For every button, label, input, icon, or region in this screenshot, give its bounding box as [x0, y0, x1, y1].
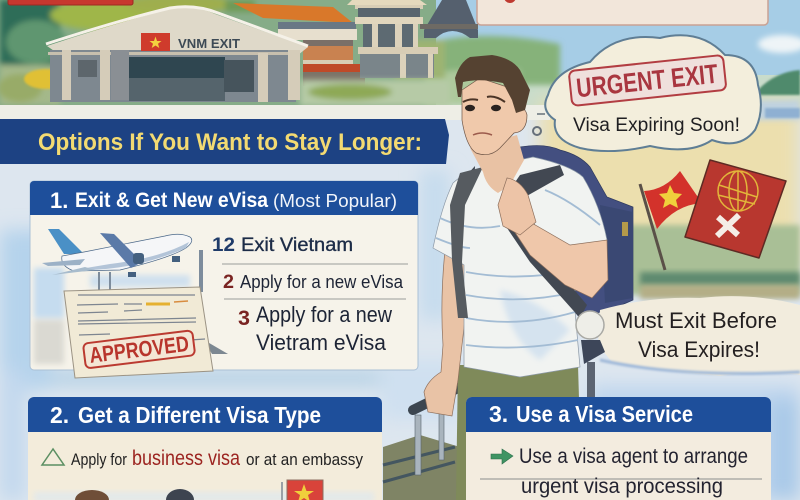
option 3 heading: Use a Visa Service	[516, 401, 693, 427]
stamp text: APPROVED	[88, 331, 190, 368]
mouth	[473, 133, 492, 135]
terracotta roof building	[233, 3, 382, 86]
thought bubble: urgent exit	[533, 35, 761, 151]
step 3: 3	[238, 307, 250, 330]
icon: Vietnam flag	[640, 171, 702, 270]
step 3	[238, 302, 392, 355]
step 2: 2	[223, 272, 234, 293]
sky and coast landscape	[420, 0, 800, 299]
tower building	[347, 0, 438, 78]
right strap	[503, 165, 587, 318]
top right card	[477, 0, 768, 25]
backpack	[450, 146, 633, 320]
panel: option 1	[30, 181, 418, 378]
right arm	[510, 222, 608, 298]
callout text: Must Exit Before	[615, 308, 777, 333]
option 3 line 2: urgent visa processing	[521, 475, 723, 498]
option 2 highlighted text: business visa	[132, 447, 240, 470]
document: approved visa	[64, 287, 228, 378]
icon: green arrow	[491, 449, 513, 464]
head	[462, 78, 527, 155]
pants	[456, 365, 582, 500]
option 1 number: 1.	[50, 188, 68, 213]
left strap	[450, 167, 483, 318]
icon: passport	[685, 160, 786, 258]
option 3 line 1: Use a visa agent to arrange	[519, 445, 748, 468]
heading text: Options If You Want to Stay Longer:	[38, 129, 422, 156]
icon: triangle	[42, 449, 64, 465]
luggage	[383, 388, 460, 500]
step 3: Vietram eVisa	[256, 330, 387, 355]
step 2: Apply for a new eVisa	[240, 271, 404, 292]
stamp: urgent exit: URGENT EXIT	[575, 59, 720, 103]
section heading band	[0, 119, 449, 164]
option 3 number: 3.	[489, 401, 508, 427]
option 1 note: (Most Popular)	[273, 191, 397, 211]
option 2 number: 2.	[50, 402, 69, 428]
hangar	[46, 7, 308, 102]
bubble caption: Visa Expiring Soon!	[573, 115, 740, 136]
watercolor behind plane	[34, 268, 190, 364]
building sign text: VNM EXIT	[178, 37, 240, 51]
character: traveller	[424, 55, 633, 500]
hair	[455, 55, 530, 113]
hand	[498, 178, 536, 235]
left arm	[424, 250, 466, 416]
icon: airplane	[42, 229, 192, 277]
callout text: Visa Expires!	[638, 337, 760, 362]
option 2 heading: Get a Different Visa Type	[78, 402, 321, 428]
neck	[470, 135, 524, 193]
eyes	[465, 105, 475, 111]
icon: yellow bush	[24, 69, 100, 100]
shirt shading and stripes	[436, 190, 600, 360]
step 1: 12	[212, 235, 235, 256]
figures peeking	[34, 480, 374, 500]
x mark	[717, 215, 739, 236]
stand posts	[98, 250, 203, 292]
panel: option 3	[466, 397, 771, 500]
white road strip	[0, 105, 550, 120]
shirt	[433, 157, 607, 377]
option 1 heading: Exit & Get New eVisa	[75, 189, 268, 212]
approved stamp	[83, 330, 195, 368]
top left banner edge	[8, 0, 133, 5]
callout: must exit	[576, 296, 800, 398]
step 1: Exit Vietnam	[241, 235, 353, 256]
option 2 body text: Apply for	[71, 450, 127, 469]
panel: option 2	[28, 397, 382, 500]
eiffel style tower	[424, 0, 478, 38]
exit building scene	[0, 0, 560, 106]
option 2 body text end: or at an embassy	[246, 450, 363, 469]
step 3: Apply for a new	[256, 302, 392, 327]
